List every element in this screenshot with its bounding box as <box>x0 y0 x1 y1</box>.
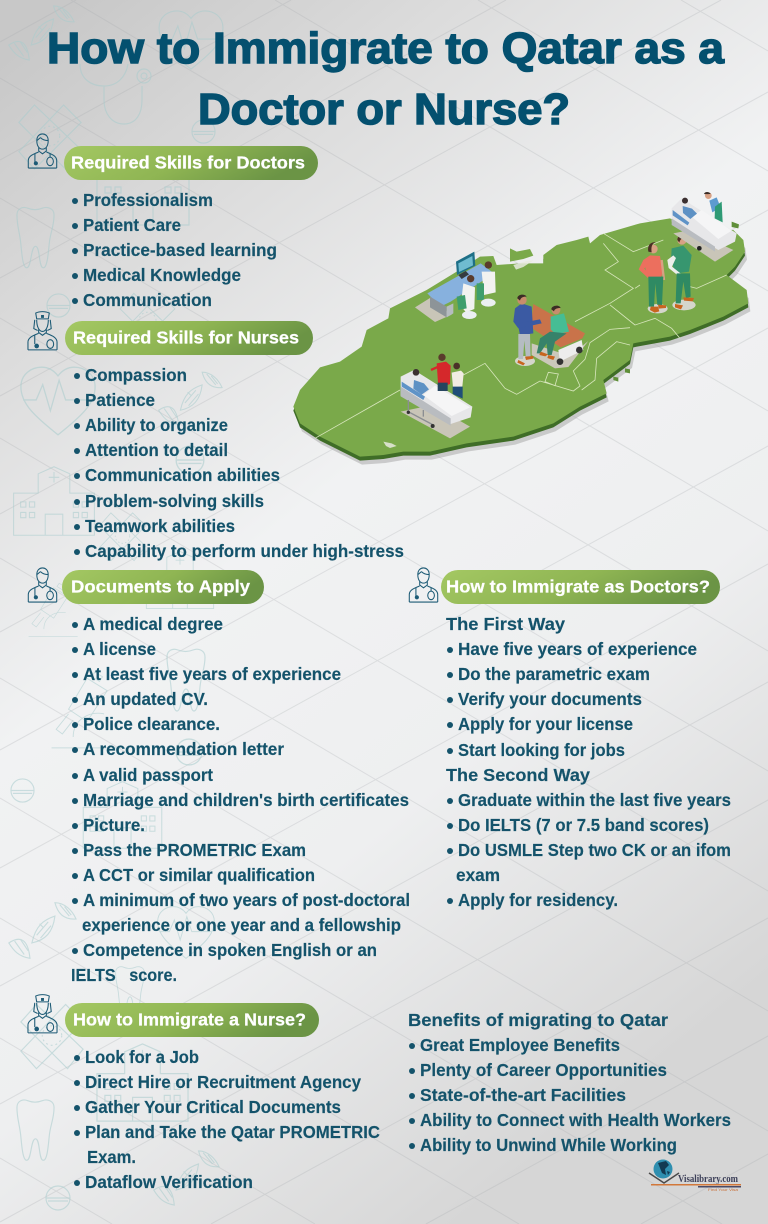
section: documents to apply <box>28 568 410 985</box>
list: nurse steps: Plan and Take the Qatar PROMETRIC <box>85 1122 380 1142</box>
map surface <box>293 218 748 457</box>
list: nurse steps: Dataflow Verification <box>85 1172 253 1192</box>
heading pill: Required Skills for Doctors <box>64 146 318 180</box>
list: documents <box>71 614 410 985</box>
list: documents: A valid passport <box>83 765 213 785</box>
icon: doctor <box>409 568 438 602</box>
list: nurse skills: Communication abilities <box>85 465 280 485</box>
logo: Visalibrary.com <box>649 1160 741 1192</box>
list: nurse skills: Problem-solving skills <box>85 491 264 511</box>
title: Doctor or Nurse? <box>198 85 570 134</box>
icon: doctor <box>28 134 57 168</box>
list: documents: Picture. <box>83 815 145 835</box>
list: nurse steps: Direct Hire or Recruitment Agency <box>85 1072 361 1092</box>
list: first way: The First Way <box>446 614 565 634</box>
list: first way <box>446 614 697 760</box>
list: second way: Do USMLE Step two CK or an ifom <box>458 840 731 860</box>
list: nurse steps <box>74 1047 380 1192</box>
heading pill: How to Immigrate as Doctors? <box>441 570 720 604</box>
list: second way: Graduate within the last five years <box>458 790 731 810</box>
list: documents: A recommendation letter <box>83 739 284 759</box>
title <box>47 24 725 134</box>
list: nurse steps: Look for a Job <box>85 1047 199 1067</box>
list: doctor skills: Medical Knowledge <box>83 265 241 285</box>
heading pill: How to Immigrate a Nurse? <box>65 1003 319 1037</box>
list: nurse skills: Teamwork abilities <box>85 516 235 536</box>
section: benefits of migrating to Qatar: State-of-the-art Facilities <box>420 1085 626 1105</box>
list: second way: exam <box>456 865 500 885</box>
section: how to immigrate as doctors <box>409 568 731 910</box>
list: documents: IELTS score. <box>71 965 177 985</box>
scene: doctor and seated patient <box>513 295 588 368</box>
heading pill: Documents to Apply <box>62 570 264 604</box>
list: documents: Marriage and children's birth certificates <box>83 790 409 810</box>
list: first way: Verify your documents <box>458 689 642 709</box>
list: doctor skills: Professionalism <box>83 190 213 210</box>
list: nurse skills: Attention to detail <box>85 440 228 460</box>
list: documents: experience or one year and a fellowship <box>82 915 401 935</box>
list: first way: Apply for your license <box>458 714 633 734</box>
section: required skills for doctors <box>28 134 318 310</box>
section: benefits of migrating to Qatar: Ability to Connect with Health Workers <box>420 1110 731 1130</box>
section: benefits of migrating to Qatar: Great Employee Benefits <box>420 1035 620 1055</box>
list: nurse steps: Gather Your Critical Documents <box>85 1097 341 1117</box>
region borders <box>315 233 727 438</box>
list: nurse steps: Exam. <box>87 1147 136 1167</box>
section: benefits of migrating to Qatar: Benefits of migrating to Qatar <box>408 1010 668 1030</box>
icon: nurse <box>28 312 57 350</box>
icon: doctor <box>28 568 57 602</box>
section: benefits of migrating to Qatar: Ability to Unwind While Working <box>420 1135 677 1155</box>
list: nurse skills <box>74 365 404 561</box>
map shadow <box>295 226 750 465</box>
logo: Visalibrary.com: Visalibrary.com <box>678 1174 738 1185</box>
heading pill: Documents to Apply: Documents to Apply <box>71 576 250 596</box>
list: documents: A CCT or similar qualification <box>83 865 315 885</box>
icon: nurse <box>28 995 57 1033</box>
list: second way <box>446 765 731 910</box>
heading pill: How to Immigrate as Doctors?: How to Immigrate as Doctors? <box>446 576 710 596</box>
section: benefits of migrating to Qatar: Plenty of Career Opportunities <box>420 1060 667 1080</box>
list: second way: The Second Way <box>446 765 590 785</box>
list: second way: Apply for residency. <box>458 890 618 910</box>
scene: doctors at desk <box>415 252 496 322</box>
list: nurse skills: Compassion <box>85 365 187 385</box>
heading pill: Required Skills for Nurses <box>65 321 313 355</box>
list: documents: A license <box>83 639 156 659</box>
list: documents: Police clearance. <box>83 714 220 734</box>
section: how to immigrate a nurse <box>28 995 380 1192</box>
list: doctor skills: Communication <box>83 290 212 310</box>
list: documents: Pass the PROMETRIC Exam <box>83 840 306 860</box>
list: nurse skills: Patience <box>85 390 155 410</box>
faint medical background icons <box>9 6 223 1210</box>
list: first way: Do the parametric exam <box>458 664 650 684</box>
scene: patient bed and visitors <box>401 354 472 438</box>
section: required skills for nurses <box>28 312 404 561</box>
title: How to Immigrate to Qatar as a <box>47 24 725 73</box>
list: doctor skills: Patient Care <box>83 215 181 235</box>
section: benefits of migrating to Qatar <box>408 1010 731 1155</box>
list: documents: Competence in spoken English or an <box>83 940 377 960</box>
heading pill: Required Skills for Nurses: Required Skills for Nurses <box>73 328 299 348</box>
heading pill: Required Skills for Doctors: Required Skills for Doctors <box>71 152 305 172</box>
list: doctor skills: Practice-based learning <box>83 240 277 260</box>
map side <box>293 222 748 461</box>
list: documents: A medical degree <box>83 614 223 634</box>
list: documents: A minimum of two years of post-doctoral <box>83 890 410 910</box>
list: nurse skills: Capability to perform under high-stress <box>85 541 404 561</box>
list: nurse skills: Ability to organize <box>85 415 228 435</box>
list: documents: At least five years of experience <box>83 664 341 684</box>
list: documents: An updated CV. <box>83 689 208 709</box>
list: first way: Have five years of experience <box>458 639 697 659</box>
scene: nurse at bed <box>672 192 737 262</box>
list: second way: Do IELTS (7 or 7.5 band scores) <box>458 815 709 835</box>
map of Qatar with medical scenes <box>293 192 750 465</box>
list: first way: Start looking for jobs <box>458 740 625 760</box>
logo: Visalibrary.com: Find Your Visa <box>708 1187 739 1192</box>
list: doctor skills <box>72 190 277 310</box>
heading pill: How to Immigrate a Nurse?: How to Immigrate a Nurse? <box>73 1010 306 1030</box>
scene: two staff standing <box>639 235 696 313</box>
